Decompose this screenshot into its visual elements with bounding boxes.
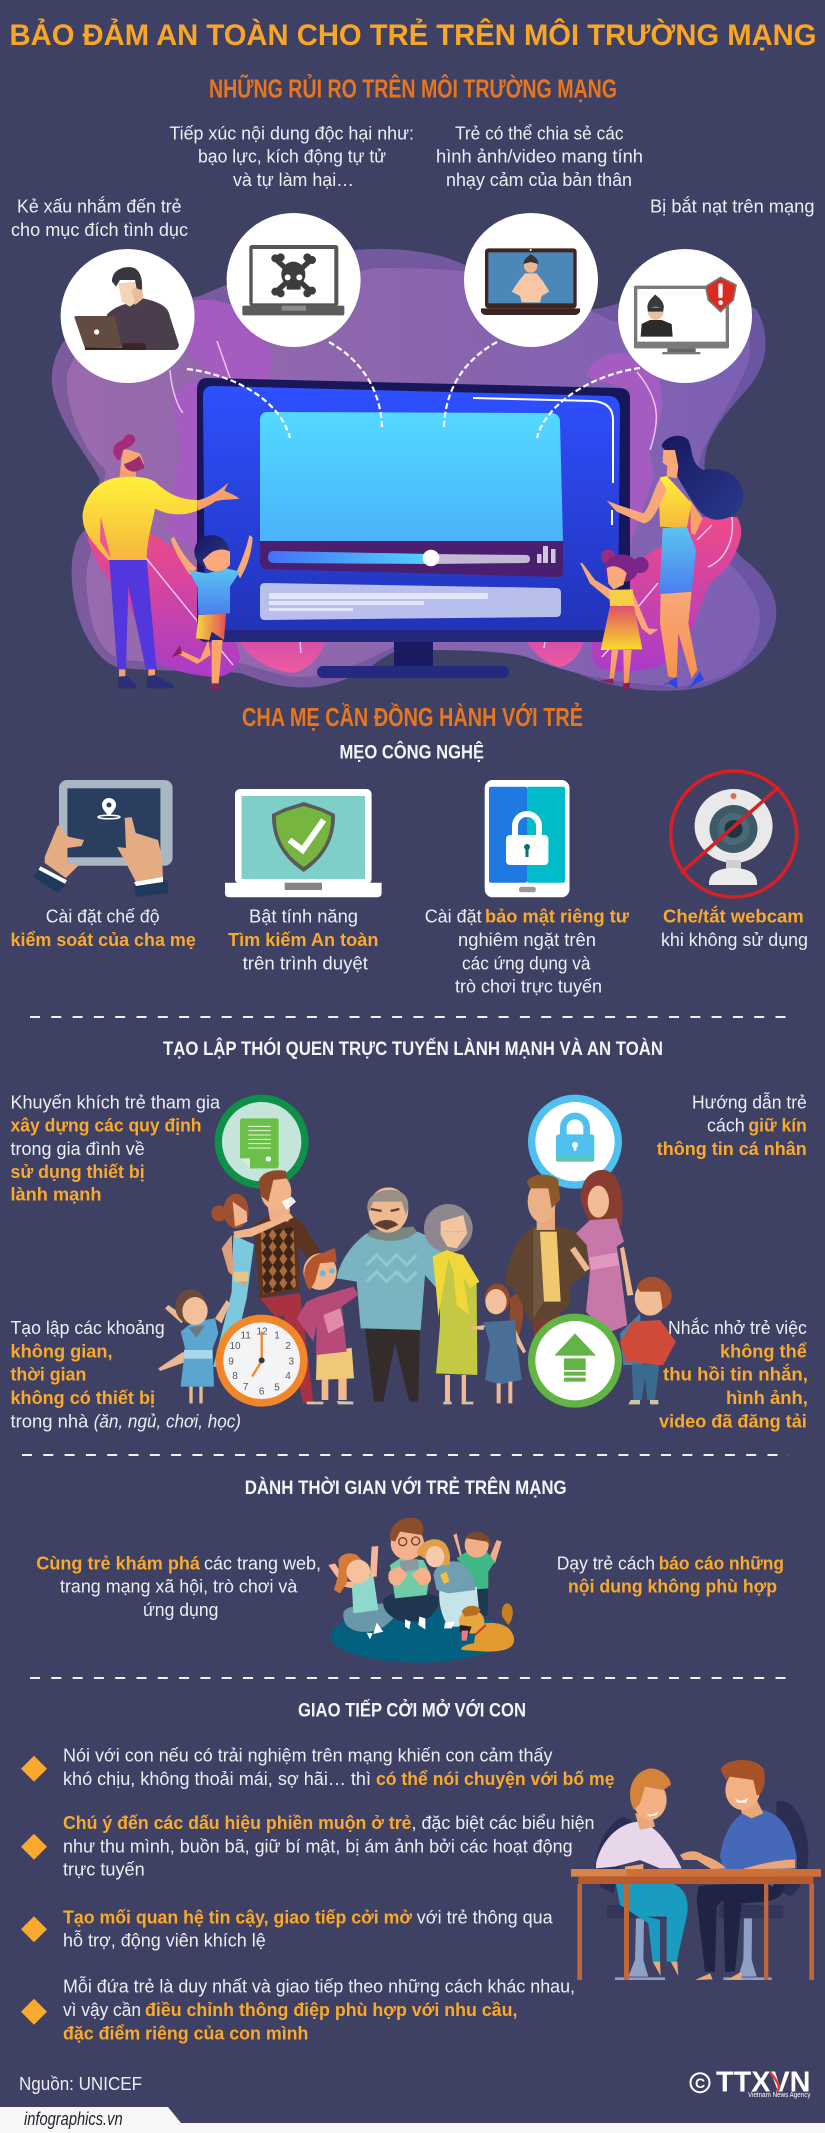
risk text: harmful content: và tự làm hại… — [233, 170, 354, 190]
grandfather — [337, 1187, 443, 1402]
bullet 1: khó chịu, không thoải mái, sợ hãi… thì — [63, 1769, 371, 1789]
bullet 3: Tạo mối quan hệ tin cậy, giao tiếp cởi mở — [63, 1907, 412, 1927]
caption: parental controls: kiểm soát của cha mẹ — [10, 930, 196, 950]
caption: strict privacy settings: các ứng dụng và — [462, 953, 591, 973]
clock: 1 — [274, 1330, 280, 1341]
caption: safe search — [228, 907, 378, 973]
hero illustration: family and giant screen — [52, 213, 776, 691]
illustration: parent and child talking at table — [571, 1760, 821, 1980]
mother in blue dress — [211, 1194, 293, 1368]
clock: 10 — [229, 1341, 241, 1352]
caption: parental controls — [10, 907, 196, 950]
TTXVN logo: Vietnam News Agency — [748, 2092, 811, 2099]
icon: blue padlock badge — [532, 1098, 618, 1185]
text: explore together: ứng dụng — [143, 1600, 218, 1620]
caption: parental controls: Cài đặt chế độ — [46, 907, 159, 927]
caption: cover webcam: khi không sử dụng — [661, 930, 808, 950]
risk text: predators: cho mục đích tình dục — [11, 220, 188, 240]
clock: 11 — [240, 1330, 251, 1341]
mother in pink dress — [570, 1170, 633, 1333]
risk text: sensitive images: Trẻ có thể chia sẻ các — [455, 123, 624, 143]
bullet 2: như thu mình, buồn bã, giữ bí mật, bị ám ảnh bởi các hoạt động — [63, 1836, 573, 1856]
circle icon: child on laptop screen — [464, 213, 598, 347]
child figure — [596, 1768, 688, 1976]
circle icon: skull on laptop — [227, 213, 361, 347]
text: keep personal information private — [657, 1091, 807, 1159]
grandmother — [424, 1204, 479, 1404]
girl left — [328, 1546, 395, 1639]
bullet 4: điều chỉnh thông điệp phù hợp với nhu cầu, — [145, 2000, 517, 2020]
little girl in dots dress — [472, 1284, 526, 1403]
clock: 5 — [274, 1382, 280, 1393]
table — [571, 1869, 821, 1980]
boy behind — [453, 1532, 502, 1616]
text: family rules: Khuyến khích trẻ tham gia — [10, 1092, 221, 1112]
text: family rules: xây dựng các quy định — [10, 1116, 202, 1136]
bullet 2: Chú ý đến các dấu hiệu phiền muộn ở trẻ — [63, 1813, 412, 1833]
heading: healthy habits: TẠO LẬP THÓI QUEN TRỰC TUYẾN LÀNH MẠNH VÀ AN TOÀN — [163, 1038, 663, 1060]
text: posts cannot be recalled — [659, 1317, 808, 1431]
risk text: predators: Kẻ xấu nhắm đến trẻ — [17, 196, 182, 217]
icon: green document badge — [218, 1098, 305, 1185]
right group of people — [424, 1170, 676, 1404]
text: teach reporting: báo cáo những — [659, 1553, 784, 1573]
heading: online risks: NHỮNG RỦI RO TRÊN MÔI TRƯỜNG MẠNG — [209, 72, 617, 104]
heading: open communication: GIAO TIẾP CỞI MỞ VỚI CON — [298, 1700, 526, 1722]
TTXVN logo: C — [695, 2075, 705, 2091]
bullet 4: đặc điểm riêng của con mình — [63, 2023, 308, 2043]
icon: webcam crossed out — [671, 771, 797, 897]
text: posts cannot be recalled: Nhắc nhở trẻ việc — [668, 1317, 807, 1338]
text: device-free spaces and times: trong nhà — [10, 1411, 89, 1431]
dog — [459, 1603, 514, 1652]
text: device-free spaces and times: (ăn, ngủ, chơi, học) — [94, 1411, 241, 1431]
text: explore together: Cùng trẻ khám phá — [36, 1553, 201, 1573]
clock: 4 — [285, 1371, 291, 1382]
boy in red sweater — [620, 1277, 676, 1404]
caption: safe search: Bật tính năng — [249, 907, 358, 927]
source: Nguồn: UNICEF — [19, 2074, 142, 2094]
caption: safe search: trên trình duyệt — [243, 953, 368, 973]
text: device-free spaces and times: thời gian — [10, 1365, 86, 1385]
caption: strict privacy settings: Cài đặt — [425, 907, 482, 927]
text: keep personal information private: giữ kín — [748, 1116, 807, 1136]
risk text: cyberbullying: Bị bắt nạt trên mạng — [650, 196, 814, 217]
TTXVN logo: TTXVN — [716, 2067, 810, 2099]
text: family rules: sử dụng thiết bị — [10, 1162, 145, 1182]
heading: parents accompany children: CHA MẸ CẦN ĐỒNG HÀNH VỚI TRẺ — [242, 702, 583, 732]
caption: strict privacy settings — [425, 907, 630, 997]
risk text: predators — [11, 196, 188, 240]
text: teach reporting: Dạy trẻ cách — [557, 1553, 655, 1573]
chairs — [595, 1801, 808, 1980]
bullet 3: hỗ trợ, động viên khích lệ — [63, 1930, 266, 1951]
bullet 1: có thể nói chuyện với bố mẹ — [376, 1769, 614, 1789]
heading: tech tips: MẸO CÔNG NGHỆ — [340, 741, 484, 763]
circle icon: predator at laptop — [61, 249, 195, 383]
icon: green up arrow badge — [532, 1317, 618, 1404]
text: posts cannot be recalled: hình ảnh, — [726, 1388, 808, 1408]
clock: 7 — [243, 1382, 249, 1393]
clock: 2 — [285, 1341, 291, 1352]
icon: phone with padlock — [485, 780, 570, 897]
small girl in blue — [158, 1289, 230, 1403]
boy figure — [171, 535, 253, 689]
caption: safe search: Tìm kiếm An toàn — [228, 930, 378, 950]
text: keep personal information private: thông tin cá nhân — [657, 1139, 807, 1159]
circle icon: masked bully on monitor — [618, 249, 752, 383]
girl figure — [580, 549, 658, 689]
text: posts cannot be recalled: thu hồi tin nhắn, — [663, 1364, 808, 1385]
boy in pink shirt — [297, 1248, 358, 1404]
bullet 1 — [21, 1746, 614, 1789]
bullet 4: vì vậy cần — [63, 2000, 141, 2020]
text: family rules — [10, 1092, 221, 1205]
text: keep personal information private: Hướng dẫn trẻ — [692, 1091, 807, 1112]
bullet 1: Nói với con nếu có trải nghiệm trên mạng khiến con cảm thấy — [63, 1746, 552, 1766]
clock: 8 — [232, 1371, 238, 1382]
icon: tablet with hands — [33, 780, 173, 897]
text: family rules: trong gia đình về — [10, 1139, 145, 1159]
risk text: harmful content: Tiếp xúc nội dung độc hại như: — [169, 123, 414, 143]
monitor — [197, 378, 630, 678]
risk text: harmful content: bạo lực, kích động tự tử — [198, 147, 386, 167]
text: explore together: trang mạng xã hội, trò chơi và — [60, 1577, 298, 1597]
clock: 9 — [228, 1356, 234, 1367]
clock: 6 — [259, 1386, 265, 1397]
text: posts cannot be recalled: không thể — [720, 1341, 807, 1361]
risk text: sensitive images: nhạy cảm của bản thân — [446, 170, 632, 190]
mother figure — [607, 436, 743, 688]
caption: strict privacy settings: trò chơi trực tuyến — [455, 977, 602, 997]
left group of people — [158, 1170, 443, 1407]
text: device-free spaces and times: không gian, — [10, 1341, 113, 1361]
bullet 3 — [21, 1907, 554, 1951]
bullet 2 — [21, 1813, 594, 1880]
text: teach reporting: nội dung không phù hợp — [568, 1577, 777, 1597]
dashed connectors — [187, 342, 640, 438]
caption: cover webcam: Che/tắt webcam — [663, 906, 804, 927]
footer band: infographics.vn — [24, 2109, 123, 2129]
clock — [216, 1315, 308, 1407]
risk text: sensitive images: hình ảnh/video mang tính — [436, 147, 643, 167]
father with sweater — [253, 1170, 321, 1403]
father figure — [83, 434, 239, 688]
text: posts cannot be recalled: video đã đăng tải — [659, 1411, 807, 1431]
father in brown jacket — [505, 1175, 596, 1348]
text: keep personal information private: cách — [707, 1116, 745, 1136]
text: explore together — [36, 1553, 321, 1620]
risk text: harmful content — [169, 123, 414, 190]
clock: 3 — [289, 1356, 295, 1367]
mother centre — [417, 1539, 479, 1628]
text: device-free spaces and times: không có thiết bị — [10, 1388, 155, 1408]
clock: 12 — [256, 1326, 268, 1337]
text: device-free spaces and times — [10, 1318, 241, 1431]
text: teach reporting — [557, 1553, 784, 1597]
risk text: sensitive images — [436, 123, 643, 190]
adult figure — [680, 1760, 797, 1980]
bullet 2: , đặc biệt các biểu hiện — [412, 1813, 594, 1833]
bullet 4: Mỗi đứa trẻ là duy nhất và giao tiếp theo những cách khác nhau, — [63, 1976, 575, 1997]
caption: strict privacy settings: bảo mật riêng tư — [485, 907, 630, 927]
family group illustration — [158, 1098, 676, 1407]
caption: strict privacy settings: nghiêm ngặt trên — [458, 930, 596, 950]
icon: laptop with shield — [225, 789, 382, 897]
father centre — [383, 1518, 439, 1629]
bullet 4 — [21, 1976, 575, 2043]
bullet 2: trực tuyến — [63, 1860, 145, 1880]
footer band — [0, 2107, 825, 2133]
caption: cover webcam — [661, 906, 808, 950]
title: BẢO ĐẢM AN TOÀN CHO TRẺ TRÊN MÔI TRƯỜNG MẠNG — [10, 18, 816, 52]
heading: spend time online: DÀNH THỜI GIAN VỚI TRẺ TRÊN MẠNG — [245, 1477, 567, 1499]
background blobs — [52, 249, 776, 691]
illustration: family on rug with dog — [328, 1518, 514, 1663]
text: device-free spaces and times: Tạo lập các khoảng — [10, 1318, 165, 1338]
bullet 3: với trẻ thông qua — [417, 1907, 554, 1927]
text: explore together: các trang web, — [204, 1553, 321, 1573]
text: family rules: lành mạnh — [10, 1185, 101, 1205]
